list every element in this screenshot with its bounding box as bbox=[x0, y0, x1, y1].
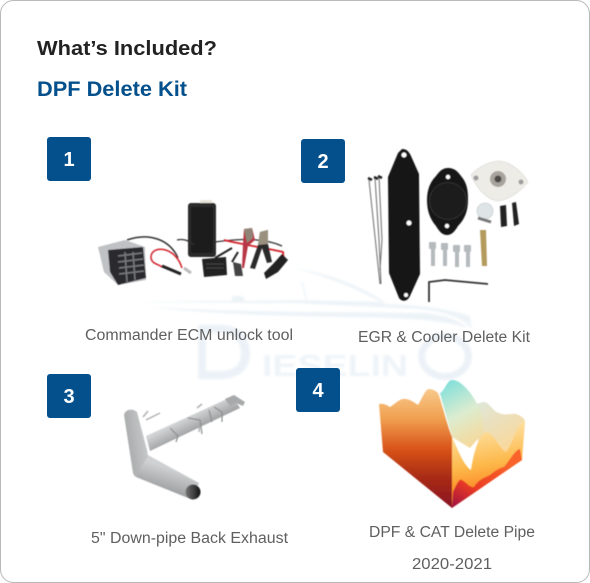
caption 2: EGR & Cooler Delete Kit bbox=[358, 329, 531, 346]
watermark: car outline and Dieselino logo bbox=[135, 268, 472, 383]
image: EGR and cooler delete kit bbox=[368, 149, 528, 302]
caption 3: 5" Down-pipe Back Exhaust bbox=[91, 530, 289, 547]
panel: item 4 bbox=[296, 368, 535, 573]
caption 1: Commander ECM unlock tool bbox=[85, 327, 293, 344]
badge 1 bbox=[47, 137, 91, 181]
badge 4: 4 bbox=[312, 380, 324, 402]
caption 4 years: 2020-2021 bbox=[412, 556, 492, 573]
subtitle: DPF Delete Kit bbox=[37, 78, 187, 101]
panel: item 2 bbox=[301, 139, 531, 346]
panel: item 3 bbox=[47, 374, 289, 547]
badge 1: 1 bbox=[63, 149, 75, 171]
title: What’s Included? bbox=[37, 38, 217, 60]
image: ECM unlock tool bbox=[98, 200, 288, 285]
badge 3 bbox=[47, 374, 91, 418]
watermark: car outline and Dieselino logo: IESELIN bbox=[262, 348, 408, 383]
badge 4 bbox=[296, 368, 340, 412]
image: down-pipe exhaust bbox=[124, 395, 245, 500]
panel: item 1 bbox=[47, 137, 293, 344]
caption 4: DPF & CAT Delete Pipe bbox=[369, 524, 535, 541]
image: terrain surface bbox=[379, 380, 525, 508]
badge 3: 3 bbox=[63, 386, 75, 408]
badge 2 bbox=[301, 139, 345, 183]
badge 2: 2 bbox=[317, 151, 329, 173]
